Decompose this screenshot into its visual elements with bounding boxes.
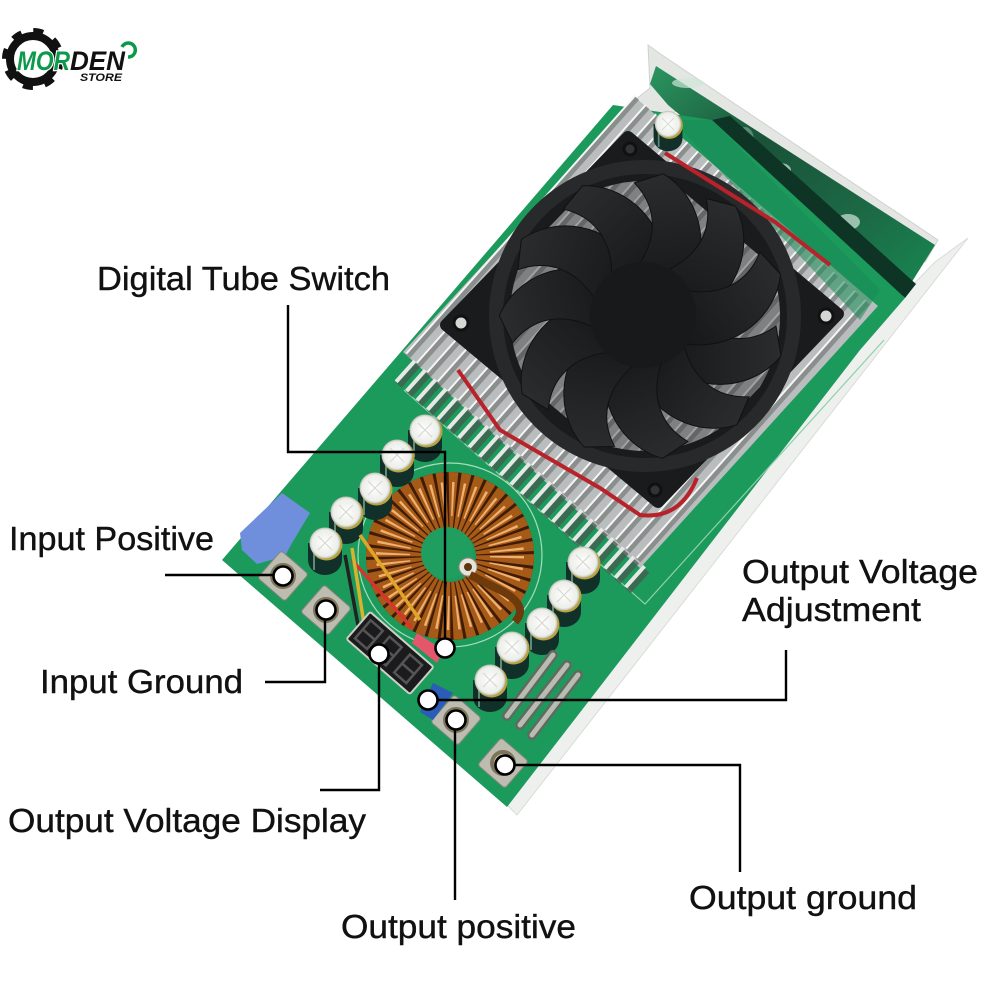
heatsink fins xyxy=(520,225,759,437)
input terminals xyxy=(258,551,308,601)
adjustment potentiometer xyxy=(420,683,453,720)
logo: Morden Store xyxy=(5,31,135,87)
fan wire upper xyxy=(665,153,830,265)
fan frame ring xyxy=(496,167,794,465)
tube switch xyxy=(412,633,443,663)
logo: Morden Store: STORE xyxy=(80,72,123,84)
callout dots xyxy=(274,566,514,774)
toroid inductor xyxy=(393,499,520,622)
label: output positive: Output positive xyxy=(341,908,576,945)
logo: Morden Store: MOR xyxy=(17,46,70,76)
rear component strip xyxy=(672,120,880,320)
fan frame xyxy=(446,137,838,502)
fan hole tint xyxy=(501,174,785,458)
label: output voltage adjustment: Adjustment xyxy=(742,591,921,628)
wall base shadow xyxy=(712,116,916,298)
labels xyxy=(8,260,978,945)
label: digital tube switch: Digital Tube Switch xyxy=(97,260,390,297)
wire bundle xyxy=(345,535,420,660)
product photo: power module xyxy=(222,45,968,815)
label: output ground: Output ground xyxy=(689,879,917,916)
label: output voltage adjustment: Output Voltage xyxy=(742,553,978,590)
fan xyxy=(446,137,838,502)
rear wall highlights xyxy=(672,78,860,230)
heatsink fin feet xyxy=(405,372,640,583)
heatsink base xyxy=(403,98,878,568)
label: input ground: Input Ground xyxy=(40,663,243,700)
fan screws xyxy=(454,143,833,496)
rear capacitor xyxy=(654,111,683,151)
thermal pad xyxy=(240,493,310,564)
rear wall green reflection xyxy=(650,66,935,300)
label: output voltage adjustment xyxy=(742,553,978,628)
output bus rods xyxy=(507,655,578,735)
output terminals xyxy=(431,695,481,745)
PCB board xyxy=(222,105,905,807)
chassis side wall xyxy=(505,238,968,815)
callout leader lines xyxy=(165,305,786,900)
toroid silkscreen xyxy=(358,463,542,647)
fan blades xyxy=(492,167,796,470)
capacitors xyxy=(308,414,600,712)
digital display xyxy=(346,612,434,694)
rear bracket xyxy=(620,45,938,262)
logo: Morden Store: DEN xyxy=(70,46,125,76)
fan hub xyxy=(590,262,696,368)
label: output voltage display: Output Voltage Display xyxy=(8,802,367,839)
silkscreen outline xyxy=(404,340,884,604)
label: input positive: Input Positive xyxy=(9,520,214,557)
fan wire lower xyxy=(458,370,697,516)
